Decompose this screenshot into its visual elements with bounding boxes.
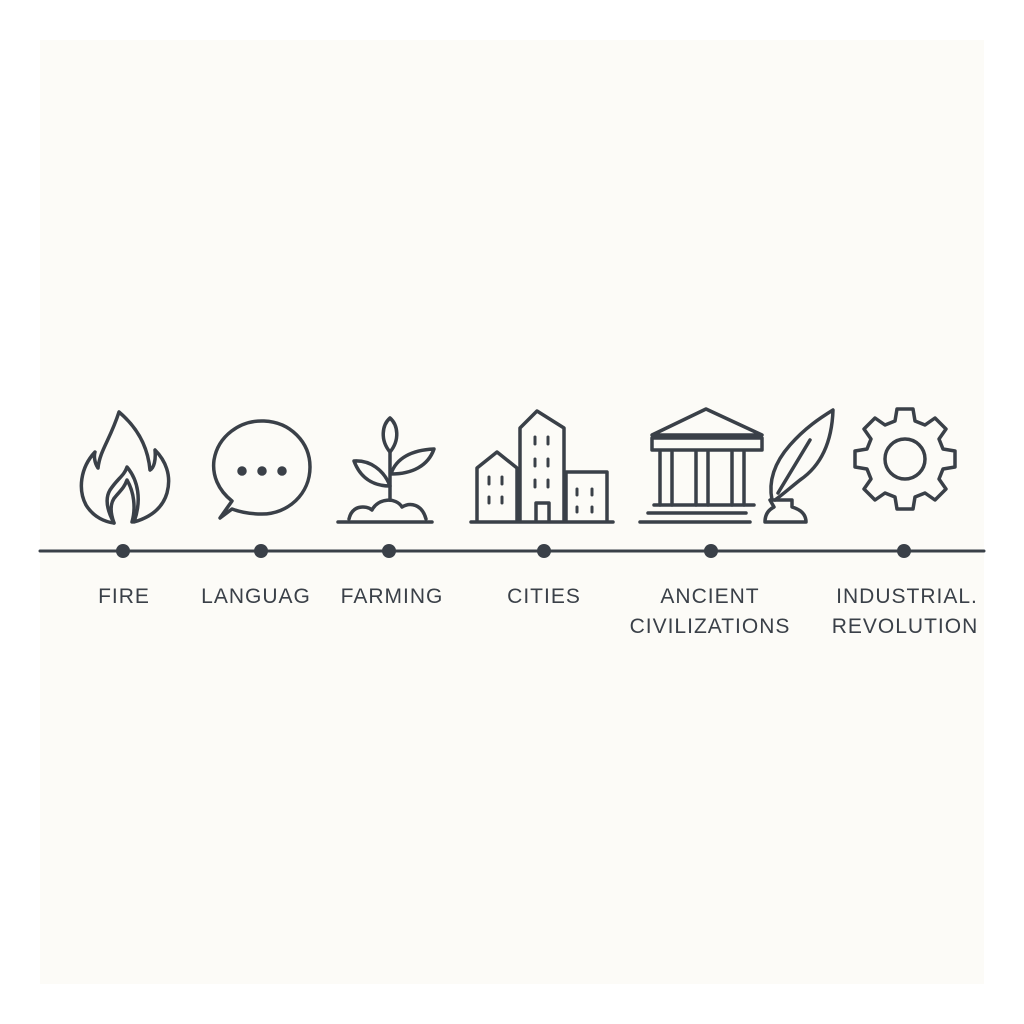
icon: fire bbox=[81, 412, 169, 523]
labels: FIRE bbox=[98, 585, 150, 608]
icon: plant bbox=[338, 418, 434, 522]
labels: CIVILIZATIONS bbox=[630, 615, 790, 638]
timeline line bbox=[40, 544, 984, 558]
labels: INDUSTRIAL. bbox=[836, 585, 978, 608]
labels bbox=[98, 585, 978, 638]
labels: CITIES bbox=[507, 585, 581, 608]
labels: ANCIENT bbox=[660, 585, 760, 608]
labels: REVOLUTION bbox=[832, 615, 978, 638]
icon: gear bbox=[855, 409, 955, 509]
icon: speech bubble bbox=[214, 421, 310, 518]
icon: temple and quill bbox=[640, 409, 833, 522]
icon: city buildings bbox=[471, 411, 613, 522]
labels: FARMING bbox=[341, 585, 443, 608]
labels: LANGUAG bbox=[201, 585, 311, 608]
